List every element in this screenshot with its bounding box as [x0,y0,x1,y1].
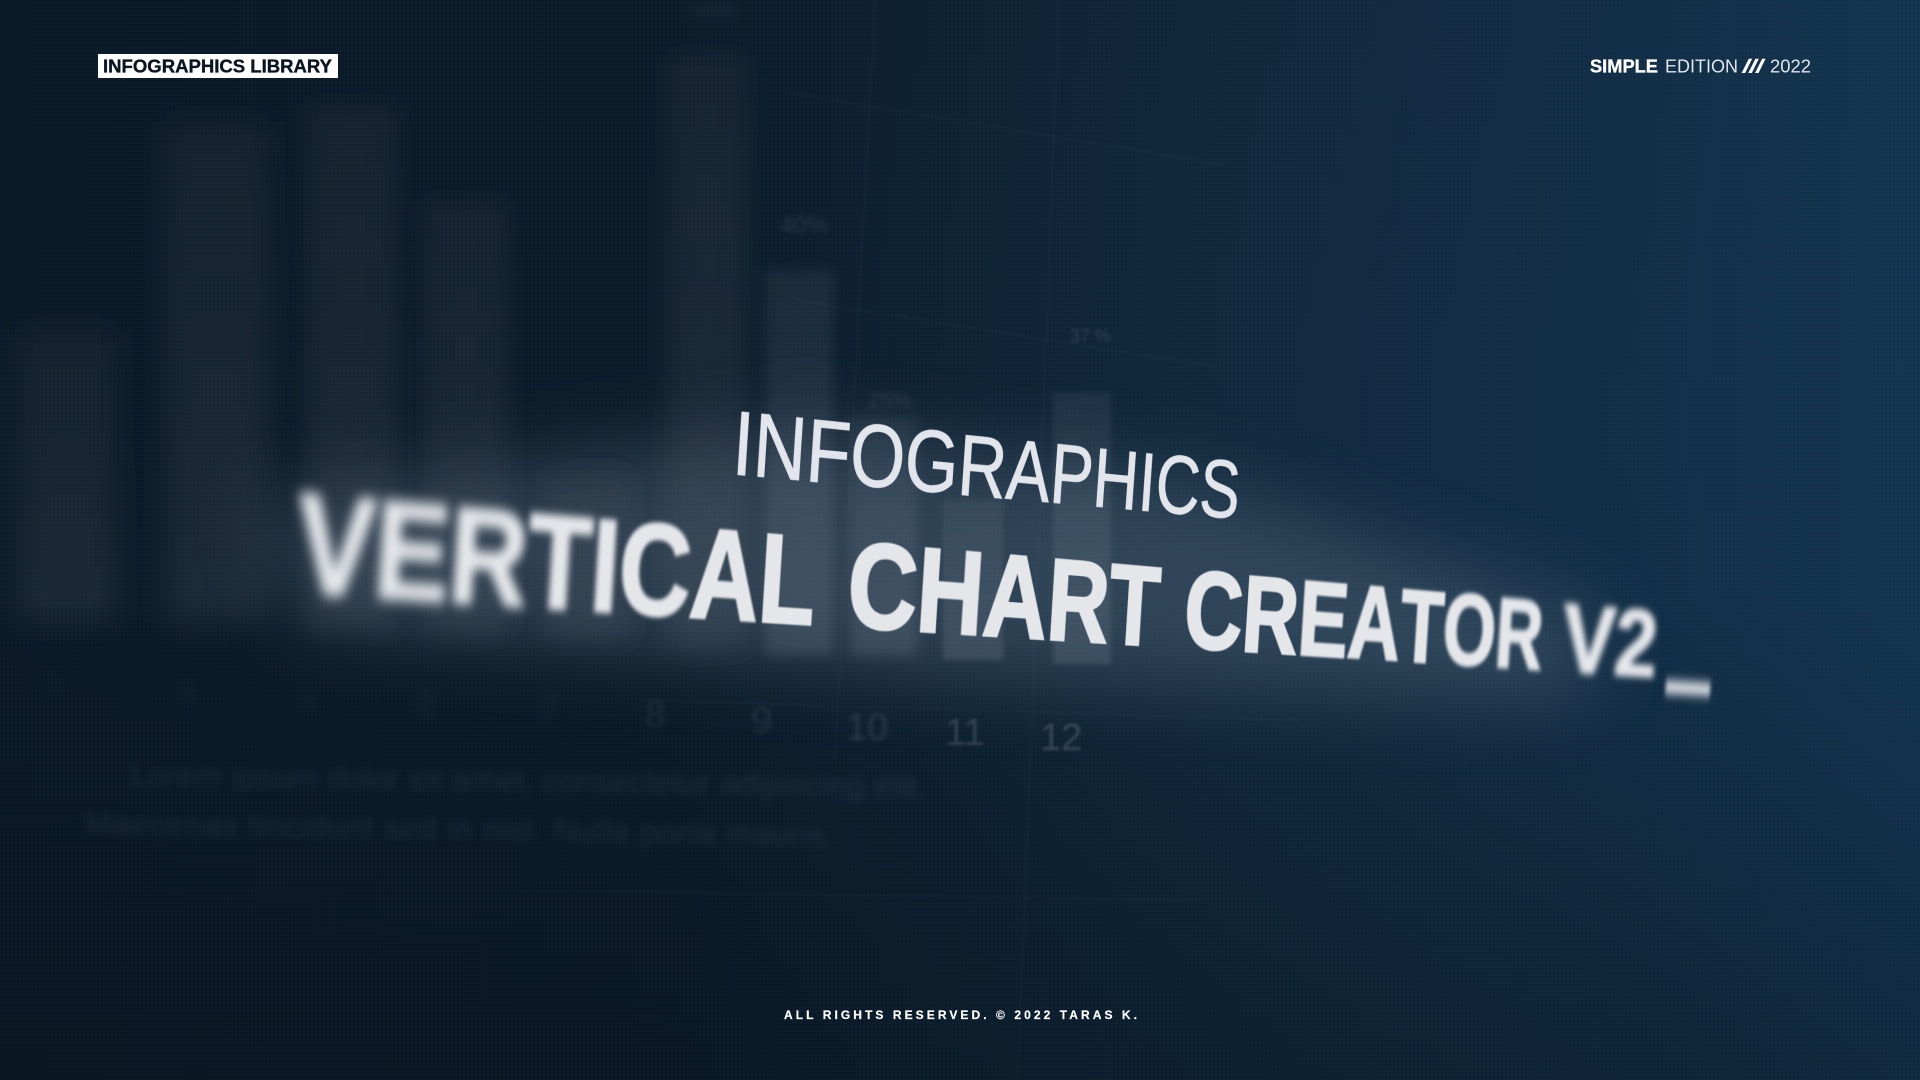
bar value labels [690,0,1111,413]
perspective grid lines [500,0,1300,1080]
label 40%: 40% [780,212,828,239]
bar 7 [545,470,631,640]
x axis numbers: 5 [297,679,318,721]
word: CREATOR: R [1239,552,1302,677]
word: V2: V [1560,582,1619,695]
edition label: /// [1742,56,1766,76]
word: VERTICAL: V [292,463,380,627]
x axis numbers: 9 [751,700,772,742]
x axis numbers: 12 [1040,717,1082,759]
word: CHART: H [913,521,988,660]
blurred paragraph: Maecenas tincidunt sed in nisl. Nulla porta mauris. [85,805,835,853]
word: V2 [1560,582,1661,697]
word: CHART: A [980,528,1052,664]
glow band behind the title [260,430,1600,700]
edition label: 2022 [1770,56,1811,76]
bar 10 [851,416,917,656]
word: CHART: R [1044,534,1113,667]
blurred paragraph [85,757,925,853]
bar 3 [18,330,116,620]
word: VERTICAL: A [686,500,764,648]
word: CREATOR: A [1345,562,1404,683]
word: CREATOR [1181,547,1546,691]
bar 12 [1053,392,1111,664]
blurred paragraph: Lorem ipsum dolor sit amet, consectetur adipiscing elit. [130,757,925,804]
word: CHART [844,515,1448,670]
bars [18,55,1111,664]
word: V2: 2 [1612,587,1661,697]
label 37%: 37 % [1070,326,1111,346]
badge: INFOGRAPHICS LIBRARY: INFOGRAPHICS LIBRARY [103,56,332,76]
cursor underscore: _ [1666,478,1722,712]
x axis numbers [40,665,1082,759]
word: CREATOR: R [1492,576,1546,691]
word: CHART: T [1105,539,1163,670]
edition label: EDITION [1665,56,1738,76]
word: VERTICAL: E [370,470,455,631]
footer copyright: ALL RIGHTS RESERVED. © 2022 TARAS K. [784,1008,1137,1022]
bar 5 [306,104,398,629]
word: VERTICAL: I [587,490,624,640]
word: VERTICAL [292,463,820,651]
bar 9 [765,270,833,655]
word: VERTICAL: R [445,477,532,635]
x axis numbers: 3 [40,665,61,707]
x axis numbers: 10 [846,707,888,749]
x axis numbers: 8 [645,694,666,736]
word: CREATOR: T [1397,567,1447,685]
bar 8 [667,55,747,650]
word: VERTICAL: T [523,484,596,639]
word: CREATOR: C [1181,547,1247,674]
word: VERTICAL: L [755,506,820,651]
x axis numbers: 6 [415,684,436,726]
edition label [1590,56,1811,76]
main title: VERTICAL CHART CREATOR V2 [292,463,1722,712]
label 25%: 25% [868,388,912,413]
word: CREATOR: E [1295,557,1352,680]
bar 11 [943,500,1003,660]
x axis numbers: 4 [175,673,196,715]
x axis numbers: 11 [945,712,984,754]
word: CREATOR: O [1440,571,1499,688]
bar 4 [165,122,270,622]
edition label: SIMPLE [1590,56,1658,76]
subtitle: INFOGRAPHICS: INFOGRAPHICS [730,391,1243,536]
word: CHART: C [844,515,922,657]
x axis numbers: 7 [537,689,558,731]
bar 6 [422,200,508,635]
word: VERTICAL: C [615,493,695,644]
